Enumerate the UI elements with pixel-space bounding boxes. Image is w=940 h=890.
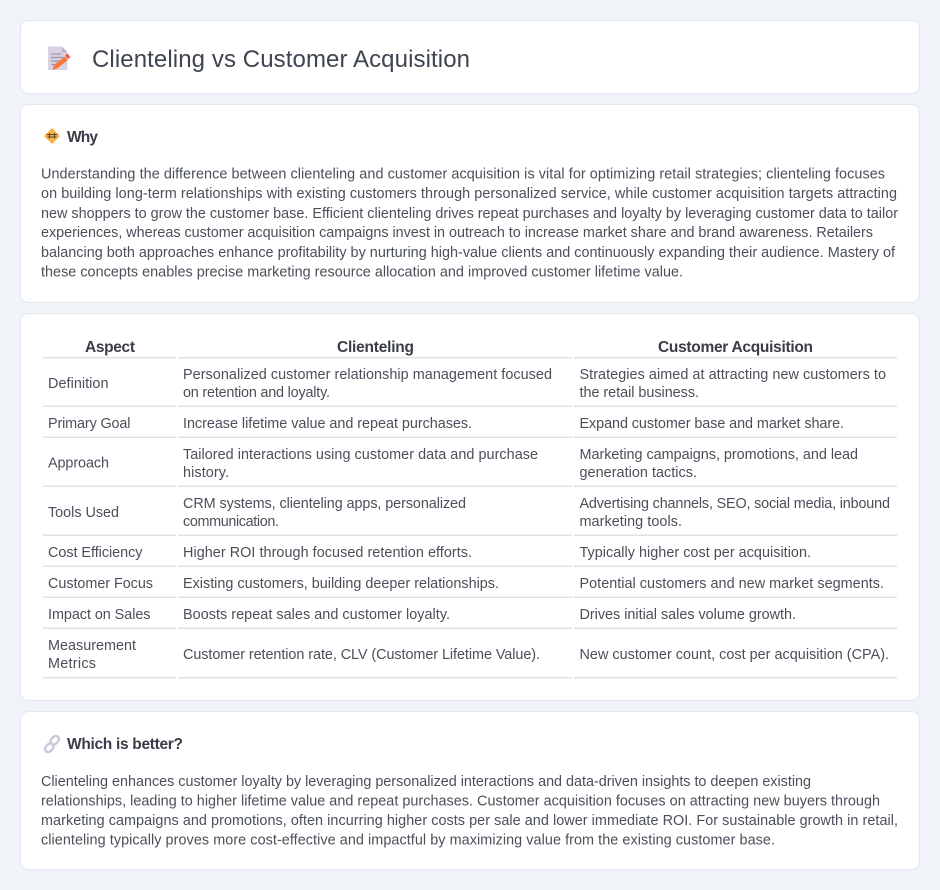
row: definition: Strategies aimed at attracting new customers to	[580, 367, 886, 383]
text block: which is better paragraph: Clienteling enhances customer loyalty by leveraging personalized interactions and data-driven insights to deepen existing	[41, 774, 811, 790]
row: cost efficiency: Cost Efficiency	[48, 545, 143, 561]
row: approach: history.	[183, 465, 229, 481]
row: measurement metrics	[48, 638, 889, 672]
icon: link	[44, 735, 60, 753]
table header: Clienteling	[337, 339, 414, 356]
row: cost efficiency: Typically higher cost per acquisition.	[580, 545, 811, 561]
text block: why paragraph: new shoppers to grow the customer base. Efficient clienteling drives repeat purchases and loyalty by leveraging customer data to tailor	[41, 206, 898, 222]
row: approach: Marketing campaigns, promotions, and lead	[580, 447, 858, 463]
row: tools used: communication.	[183, 514, 279, 530]
row: tools used: CRM systems, clienteling apps, personalized	[183, 496, 466, 512]
row: impact on sales: Boosts repeat sales and customer loyalty.	[183, 607, 450, 623]
panel: why	[20, 104, 920, 302]
row: tools used: Advertising channels, SEO, social media, inbound	[580, 496, 890, 512]
icon: memo with pencil	[48, 46, 70, 70]
row: definition: the retail business.	[580, 385, 699, 401]
row: measurement metrics: Measurement	[48, 638, 136, 654]
row: measurement metrics: Metrics	[48, 656, 96, 672]
row: customer focus: Potential customers and new market segments.	[580, 576, 884, 592]
row: impact on sales: Impact on Sales	[48, 607, 150, 623]
text block: why paragraph: on building long-term relationships with existing customers through personalized service, while customer acquisition targets attracting	[41, 186, 897, 202]
row: definition: Definition	[48, 376, 108, 392]
row: impact on sales: Drives initial sales volume growth.	[580, 607, 796, 623]
row: approach: generation tactics.	[580, 465, 697, 481]
row: approach: Approach	[48, 456, 109, 472]
table header	[85, 339, 813, 356]
table header: Aspect	[85, 339, 135, 356]
row: impact on sales	[48, 607, 796, 623]
panel: title card	[20, 20, 920, 94]
icon: warning diamond	[44, 128, 60, 144]
row: primary goal	[48, 416, 844, 432]
row: customer focus	[48, 576, 884, 592]
text block: which is better paragraph: clienteling typically proves more cost-effective and impactful by maximizing value from the existing customer base.	[41, 832, 775, 848]
row: customer focus: Customer Focus	[48, 576, 153, 592]
row: primary goal: Expand customer base and market share.	[580, 416, 844, 432]
row: approach	[48, 447, 858, 481]
text block: why paragraph: experiences, whereas customer acquisition campaigns invest in outreach to increase market share and brand awareness. Retailers	[41, 225, 873, 241]
row: definition	[48, 367, 886, 401]
row: definition: on retention and loyalty.	[183, 385, 330, 401]
row: tools used: Tools Used	[48, 505, 119, 521]
text block: why paragraph: balancing both approaches enhance profitability by nurturing high-value clients and continuously expanding their audience. Mastery of	[41, 245, 896, 261]
row: primary goal: Increase lifetime value and repeat purchases.	[183, 416, 472, 432]
text block: why paragraph: Understanding the difference between clienteling and customer acquisition is vital for optimizing retail strategies; clienteling focuses	[41, 166, 885, 182]
row: approach: Tailored interactions using customer data and purchase	[183, 447, 538, 463]
row: primary goal: Primary Goal	[48, 416, 130, 432]
heading: which is better: Which is better?	[67, 736, 183, 753]
title: Clienteling vs Customer Acquisition	[92, 46, 470, 73]
heading: why: Why	[67, 129, 98, 146]
row: definition: Personalized customer relationship management focused	[183, 367, 552, 383]
row: measurement metrics: New customer count, cost per acquisition (CPA).	[580, 647, 889, 663]
row: tools used	[48, 496, 890, 530]
row: cost efficiency	[48, 545, 811, 561]
text block: which is better paragraph: marketing campaigns and promotions, often incurring higher costs per sale and lower immediate ROI. For sustainable growth in retail,	[41, 813, 898, 829]
panel: which is better	[20, 712, 920, 870]
panel: comparison table	[20, 314, 920, 700]
text block: which is better paragraph	[41, 774, 898, 848]
row: tools used: marketing tools.	[580, 514, 682, 530]
row: cost efficiency: Higher ROI through focused retention efforts.	[183, 545, 472, 561]
row: customer focus: Existing customers, building deeper relationships.	[183, 576, 499, 592]
row: measurement metrics: Customer retention rate, CLV (Customer Lifetime Value).	[183, 647, 540, 663]
text block: why paragraph: these concepts enables precise marketing resource allocation and improved customer lifetime value.	[41, 264, 683, 280]
text block: which is better paragraph: relationships, leading to higher lifetime value and repeat purchases. Customer acquisition focuses on attracting new buyers through	[41, 794, 880, 810]
table header: Customer Acquisition	[658, 339, 813, 356]
text block: why paragraph	[41, 166, 898, 280]
